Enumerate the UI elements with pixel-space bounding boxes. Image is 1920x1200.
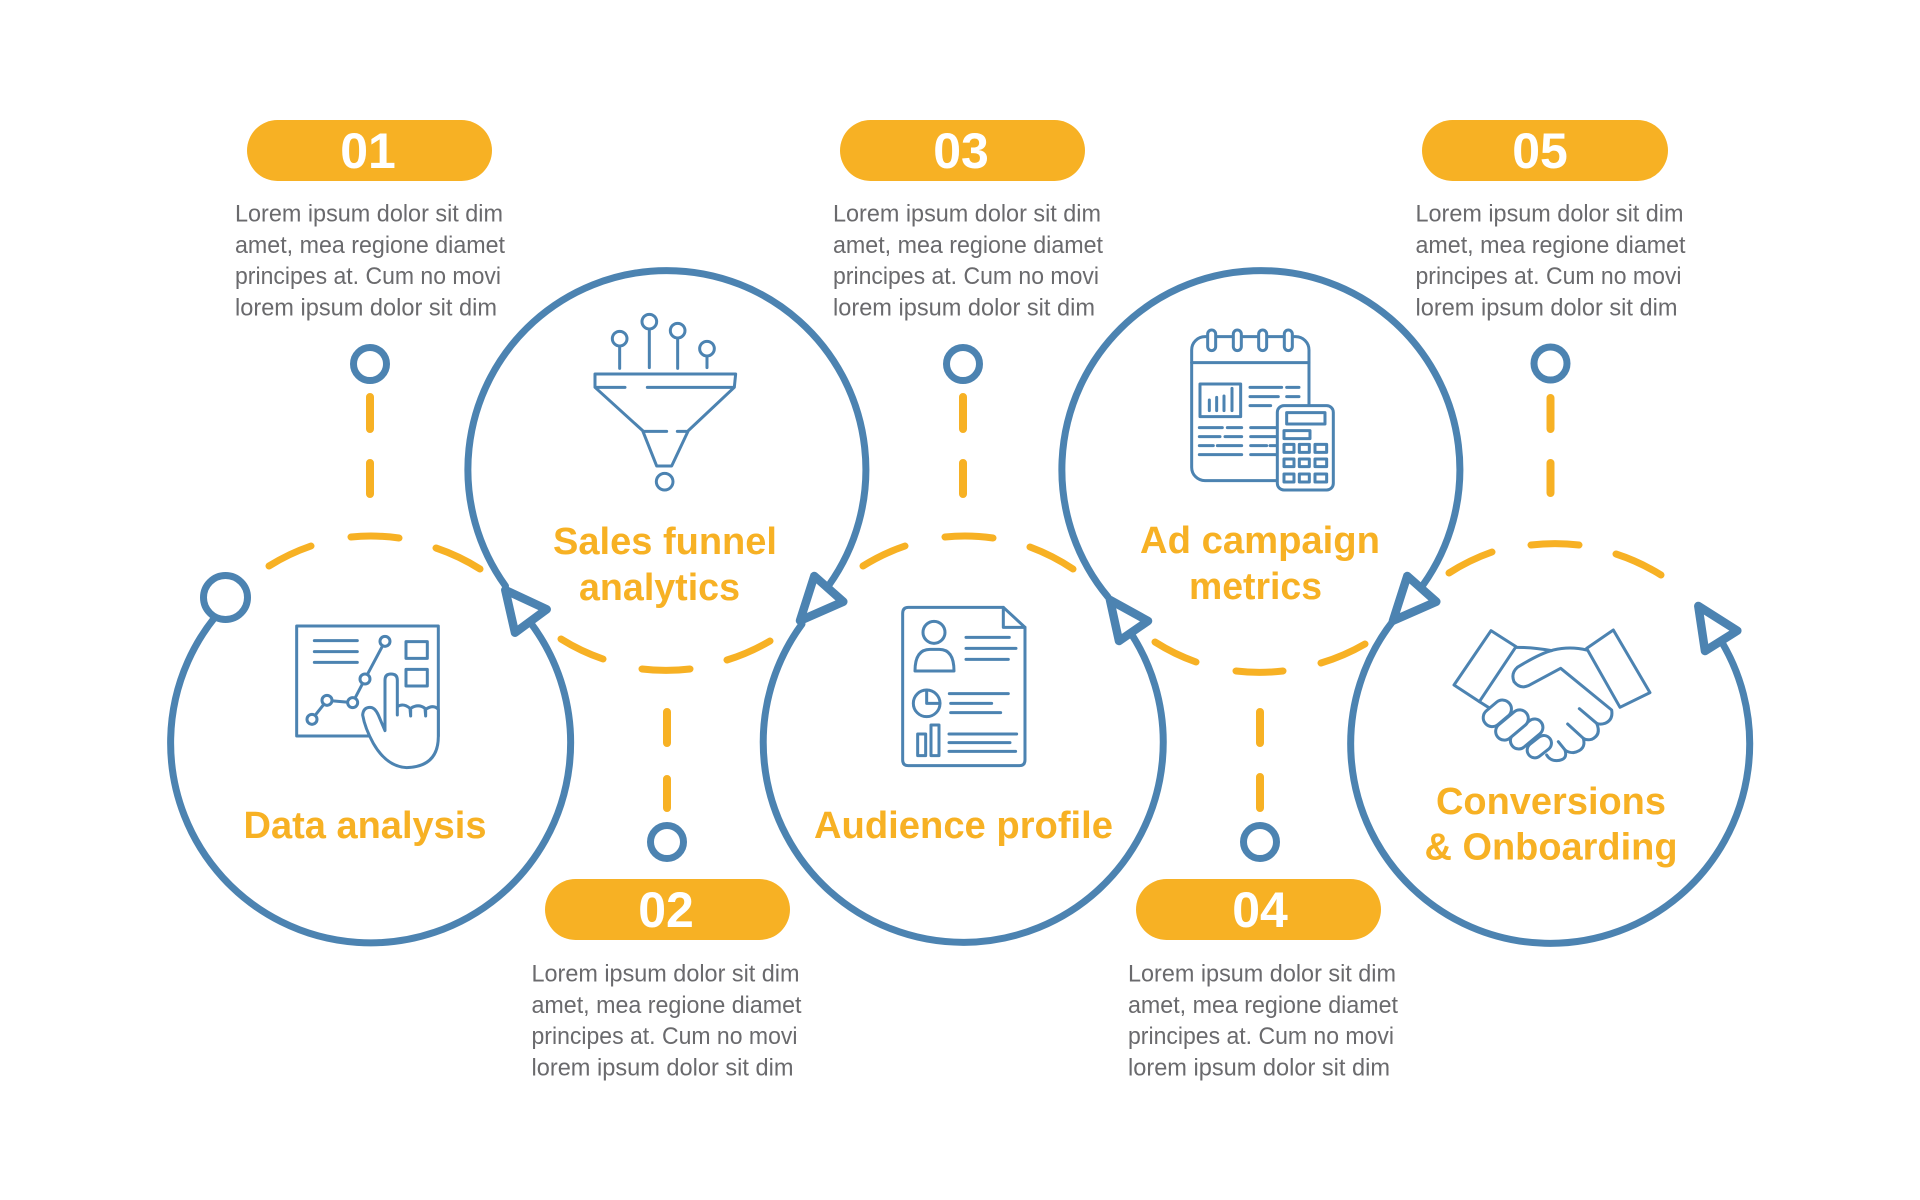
circle arc 05 — [1351, 621, 1750, 943]
icon: calendar and calculator — [1192, 330, 1333, 490]
description 04: amet, mea regione diamet — [1128, 992, 1398, 1019]
description 03 — [833, 200, 1103, 321]
description 01 — [235, 200, 505, 321]
arrowhead 04 — [1393, 576, 1436, 621]
step 4: ad campaign metrics — [1062, 271, 1460, 1081]
arrowhead 02 — [800, 576, 843, 621]
label: ad campaign metrics — [1140, 520, 1380, 608]
icon: chart with hand — [297, 626, 438, 768]
number badge 03 — [840, 120, 1085, 181]
circle arc 01 — [171, 601, 571, 943]
description 04: lorem ipsum dolor sit dim — [1128, 1054, 1390, 1081]
number badge 02: 02 — [638, 882, 694, 938]
icon: sales funnel — [595, 314, 736, 490]
connector 04 — [1244, 712, 1276, 858]
label: ad campaign metrics: Ad campaign — [1140, 520, 1380, 562]
number badge 04: 04 — [1232, 882, 1288, 938]
description 01: principes at. Cum no movi — [235, 263, 501, 290]
connector 03 — [946, 348, 980, 494]
description 01: amet, mea regione diamet — [235, 232, 505, 259]
dashed arcs connecting the circles — [269, 536, 1661, 672]
description 03: Lorem ipsum dolor sit dim — [833, 200, 1101, 228]
label: conversions and onboarding — [1424, 781, 1678, 868]
step 2: sales funnel analytics — [468, 271, 866, 1081]
icon: handshake — [1454, 630, 1650, 761]
description 03: lorem ipsum dolor sit dim — [833, 294, 1095, 321]
label: data analysis: Data analysis — [244, 805, 486, 847]
number badge 05 — [1422, 120, 1668, 181]
step 3: audience profile — [763, 120, 1163, 942]
description 01: lorem ipsum dolor sit dim — [235, 294, 497, 321]
circle arc 02 — [468, 271, 866, 586]
number badge 04 — [1136, 879, 1381, 940]
connector 02 — [650, 712, 684, 858]
number badge 02 — [545, 879, 790, 940]
description 04 — [1128, 960, 1398, 1081]
number badge 03: 03 — [933, 123, 989, 179]
description 02: Lorem ipsum dolor sit dim — [532, 960, 800, 988]
step 1: data analysis — [171, 120, 571, 943]
arrowhead 05 — [1698, 606, 1737, 651]
description 01: Lorem ipsum dolor sit dim — [235, 200, 503, 228]
label: sales funnel analytics: analytics — [579, 567, 740, 609]
arrowhead 01 — [505, 590, 547, 633]
number badge 05: 05 — [1512, 123, 1568, 179]
connector 05 — [1534, 347, 1567, 493]
label: ad campaign metrics: metrics — [1189, 566, 1322, 608]
circle arc 04 — [1062, 271, 1460, 597]
description 02 — [532, 960, 802, 1081]
label: conversions and onboarding: Conversions — [1436, 781, 1666, 823]
description 02: lorem ipsum dolor sit dim — [532, 1054, 794, 1081]
description 05: amet, mea regione diamet — [1416, 232, 1686, 259]
label: conversions and onboarding: & Onboarding — [1424, 826, 1678, 868]
icon: profile document — [903, 607, 1025, 766]
description 02: amet, mea regione diamet — [532, 992, 802, 1019]
description 05 — [1416, 200, 1686, 321]
description 05: lorem ipsum dolor sit dim — [1416, 294, 1678, 321]
description 03: principes at. Cum no movi — [833, 263, 1099, 290]
label: sales funnel analytics — [553, 521, 777, 609]
circle arc 03 — [763, 622, 1163, 942]
description 03: amet, mea regione diamet — [833, 232, 1103, 259]
start ring — [204, 576, 248, 620]
arrowhead 03 — [1110, 600, 1148, 641]
number badge 01: 01 — [340, 123, 396, 179]
label: audience profile: Audience profile — [814, 805, 1113, 847]
description 02: principes at. Cum no movi — [532, 1023, 798, 1050]
description 05: principes at. Cum no movi — [1416, 263, 1682, 290]
connector 01 — [354, 348, 386, 494]
step 5: conversions and onboarding — [1351, 120, 1750, 943]
description 04: principes at. Cum no movi — [1128, 1023, 1394, 1050]
label: sales funnel analytics: Sales funnel — [553, 521, 777, 563]
description 04: Lorem ipsum dolor sit dim — [1128, 960, 1396, 988]
number badge 01 — [247, 120, 492, 181]
description 05: Lorem ipsum dolor sit dim — [1416, 200, 1684, 228]
